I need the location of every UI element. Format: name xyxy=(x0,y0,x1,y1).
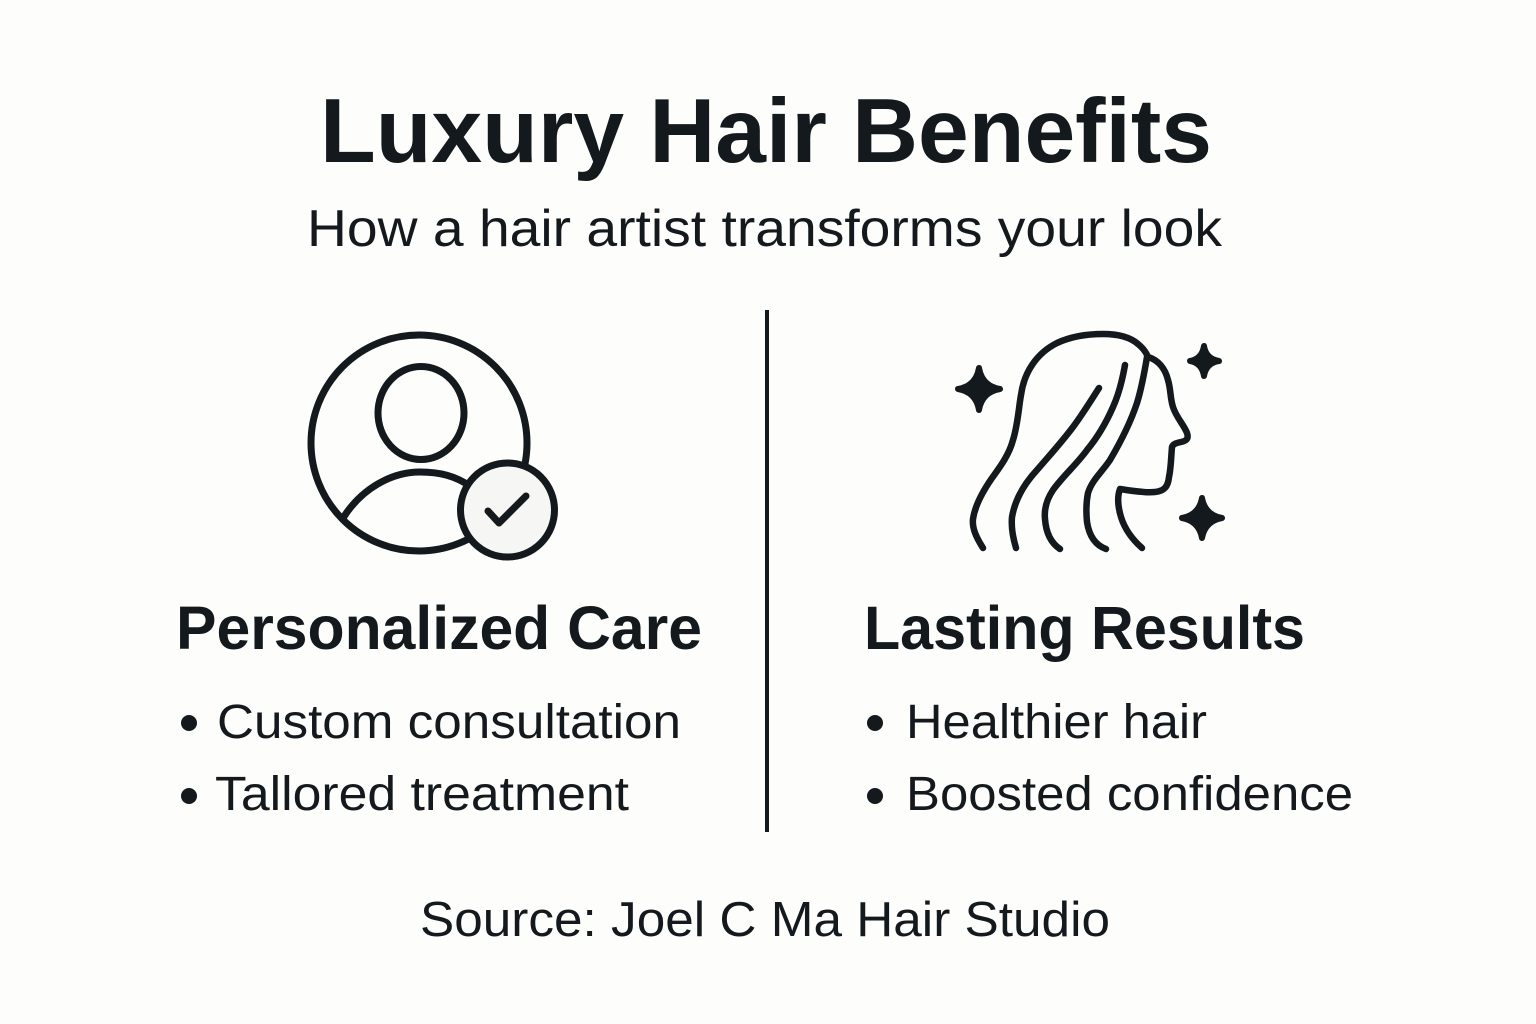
list: lasting results: Healthier hair xyxy=(906,696,1207,749)
source line: Source: Joel C Ma Hair Studio xyxy=(420,893,1110,947)
list: personalized care xyxy=(181,696,681,821)
list: lasting results: Boosted confidence xyxy=(906,768,1353,821)
icon: person in circle with check badge xyxy=(311,335,554,557)
sparkles xyxy=(958,346,1222,538)
heading: lasting results: Lasting Results xyxy=(864,594,1305,662)
subtitle: How a hair artist transforms your look xyxy=(307,199,1222,257)
title: Luxury Hair Benefits xyxy=(320,81,1212,182)
vertical divider xyxy=(765,310,769,832)
list: lasting results xyxy=(867,696,1353,821)
list: personalized care: Tallored treatment xyxy=(215,768,629,821)
icon: woman's hair profile with sparkles xyxy=(958,334,1222,549)
panel: personalized care xyxy=(176,335,702,821)
heading: personalized care: Personalized Care xyxy=(176,594,702,662)
panel: lasting results xyxy=(864,334,1353,821)
list: personalized care: Custom consultation xyxy=(217,696,681,749)
